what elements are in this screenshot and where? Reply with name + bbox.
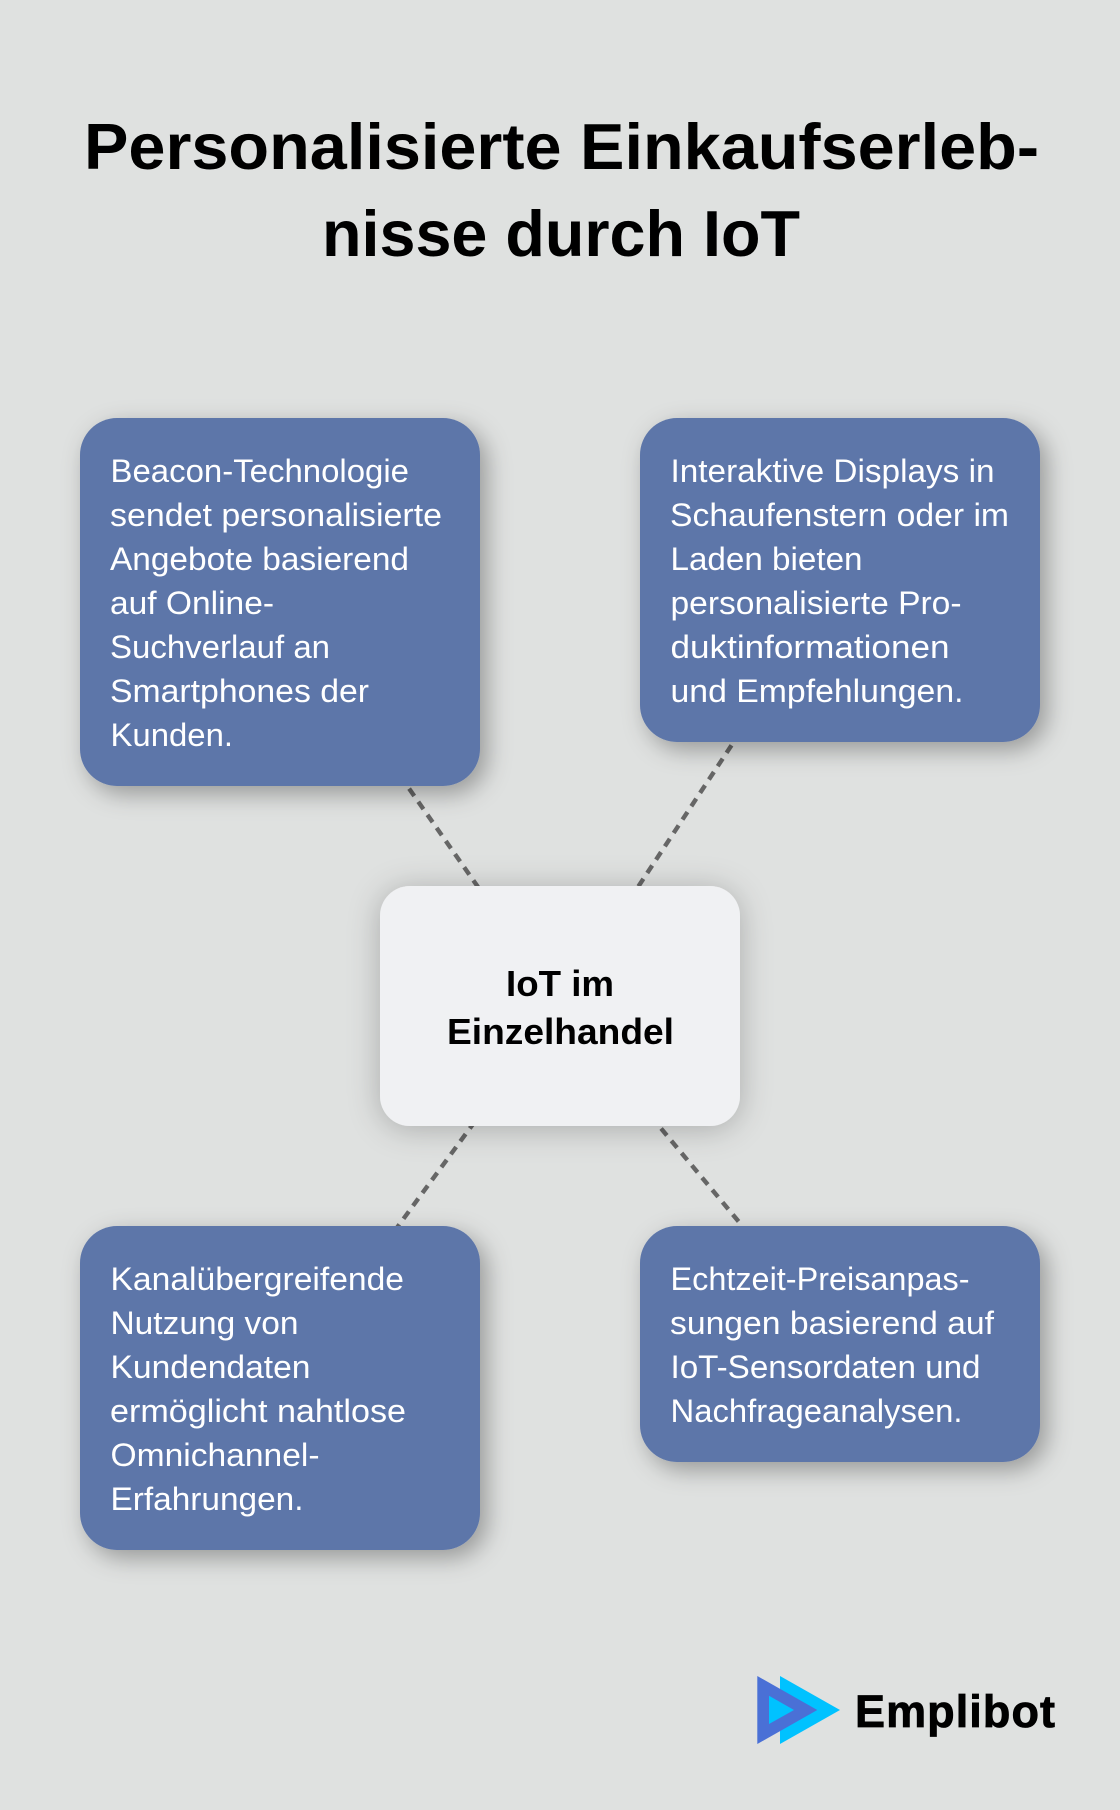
connector: center to bottom-right box <box>661 1128 739 1222</box>
connector: center to bottom-left box <box>396 1121 475 1229</box>
heading: center node: IoT im <box>506 963 614 1004</box>
text: omnichannel: Erfahrungen. <box>110 1481 304 1517</box>
text: omnichannel: Omnichannel- <box>110 1437 320 1473</box>
text: omnichannel: ermöglicht nahtlose <box>110 1393 406 1429</box>
icon: play triangles <box>757 1676 840 1744</box>
connector: top-right box to center <box>638 745 732 887</box>
text: beacon technology: Kunden. <box>110 717 233 753</box>
text: beacon technology <box>110 453 442 753</box>
text: beacon technology: auf Online- <box>110 585 274 621</box>
title: Personalisierte Einkaufserleb- <box>84 110 1039 183</box>
connector: top-left box to center <box>409 789 478 887</box>
text: beacon technology: Suchverlauf an <box>110 629 330 665</box>
text: interactive displays: und Empfehlungen. <box>670 673 964 709</box>
panel: center node <box>380 886 740 1126</box>
text: interactive displays: Interaktive Displays in <box>670 453 994 489</box>
text: omnichannel <box>110 1261 406 1517</box>
panel: interactive displays <box>640 418 1040 742</box>
text: interactive displays <box>670 453 1009 709</box>
text: omnichannel: Kanalübergreifende <box>110 1261 404 1297</box>
text: real-time pricing: Echtzeit-Preisanpas- <box>670 1261 970 1297</box>
text: interactive displays: Schaufenstern oder im <box>670 497 1009 533</box>
heading: center node: Einzelhandel <box>447 1011 674 1052</box>
heading: center node <box>447 963 674 1052</box>
logo wordmark: Emplibot <box>855 1686 1055 1737</box>
title: nisse durch IoT <box>322 197 800 270</box>
text: interactive displays: personalisierte Pro- <box>670 585 962 621</box>
text: real-time pricing: Nachfrageanalysen. <box>670 1393 962 1429</box>
text: real-time pricing: IoT-Sensordaten und <box>670 1349 980 1385</box>
text: real-time pricing <box>670 1261 994 1429</box>
text: omnichannel: Kundendaten <box>110 1349 310 1385</box>
text: real-time pricing: sungen basierend auf <box>670 1305 994 1341</box>
panel: beacon technology <box>80 418 480 786</box>
panel: real-time pricing <box>640 1226 1040 1462</box>
panel: omnichannel <box>80 1226 480 1550</box>
title <box>84 110 1039 270</box>
text: interactive displays: Laden bieten <box>670 541 862 577</box>
text: beacon technology: Angebote basierend <box>110 541 409 577</box>
text: beacon technology: Beacon-Technologie <box>110 453 409 489</box>
text: interactive displays: duktinformationen <box>670 629 950 665</box>
text: omnichannel: Nutzung von <box>110 1305 298 1341</box>
text: beacon technology: sendet personalisierte <box>110 497 442 533</box>
text: beacon technology: Smartphones der <box>110 673 369 709</box>
logo: Emplibot <box>757 1676 1055 1744</box>
